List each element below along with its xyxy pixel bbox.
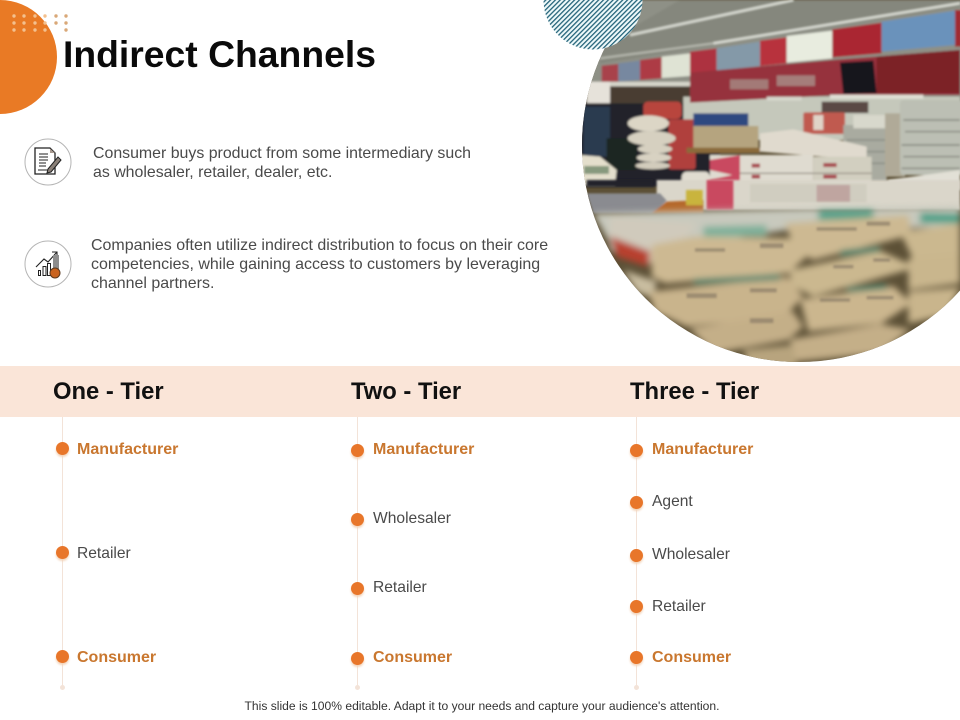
column: two tier: Manufacturer (373, 441, 474, 458)
column: two tier (350, 417, 474, 690)
column: three tier: Wholesaler (652, 546, 730, 563)
heading: two tier: Two - Tier (351, 378, 461, 405)
title: Indirect Channels (63, 33, 376, 75)
column: three tier: Consumer (652, 649, 731, 666)
column: two tier: Retailer (373, 579, 427, 596)
column: three tier: Agent (652, 493, 693, 510)
tier header band (0, 366, 960, 417)
text: companies: competencies, while gaining access to customers by leveraging (91, 256, 540, 273)
icon: document with pen (24, 138, 72, 186)
icon: growth chart with coin (24, 240, 72, 288)
text: companies: channel partners. (91, 275, 214, 292)
column: one tier: Manufacturer (77, 441, 178, 458)
text: consumer buys: as wholesaler, retailer, dealer, etc. (93, 164, 332, 181)
column: two tier: Consumer (373, 649, 452, 666)
text: consumer buys (93, 145, 471, 181)
heading: three tier: Three - Tier (630, 378, 759, 405)
decorative orange circle with dots (0, 0, 68, 114)
footer note: This slide is 100% editable. Adapt it to your needs and capture your audience's attention. (245, 699, 719, 713)
column: one tier: Consumer (77, 649, 156, 666)
text: companies: Companies often utilize indirect distribution to focus on their core (91, 237, 548, 254)
column: three tier: Retailer (652, 598, 706, 615)
column: two tier: Wholesaler (373, 510, 451, 527)
column: one tier (55, 417, 178, 690)
text: consumer buys: Consumer buys product from some intermediary such (93, 145, 471, 162)
hatched circle (544, 0, 642, 50)
column: three tier (629, 417, 754, 690)
column: three tier: Manufacturer (652, 441, 753, 458)
column: one tier: Retailer (77, 545, 131, 562)
heading: one tier: One - Tier (53, 378, 164, 405)
photo: supermarket rice bags in circle (582, 0, 960, 362)
text: companies (91, 237, 548, 292)
